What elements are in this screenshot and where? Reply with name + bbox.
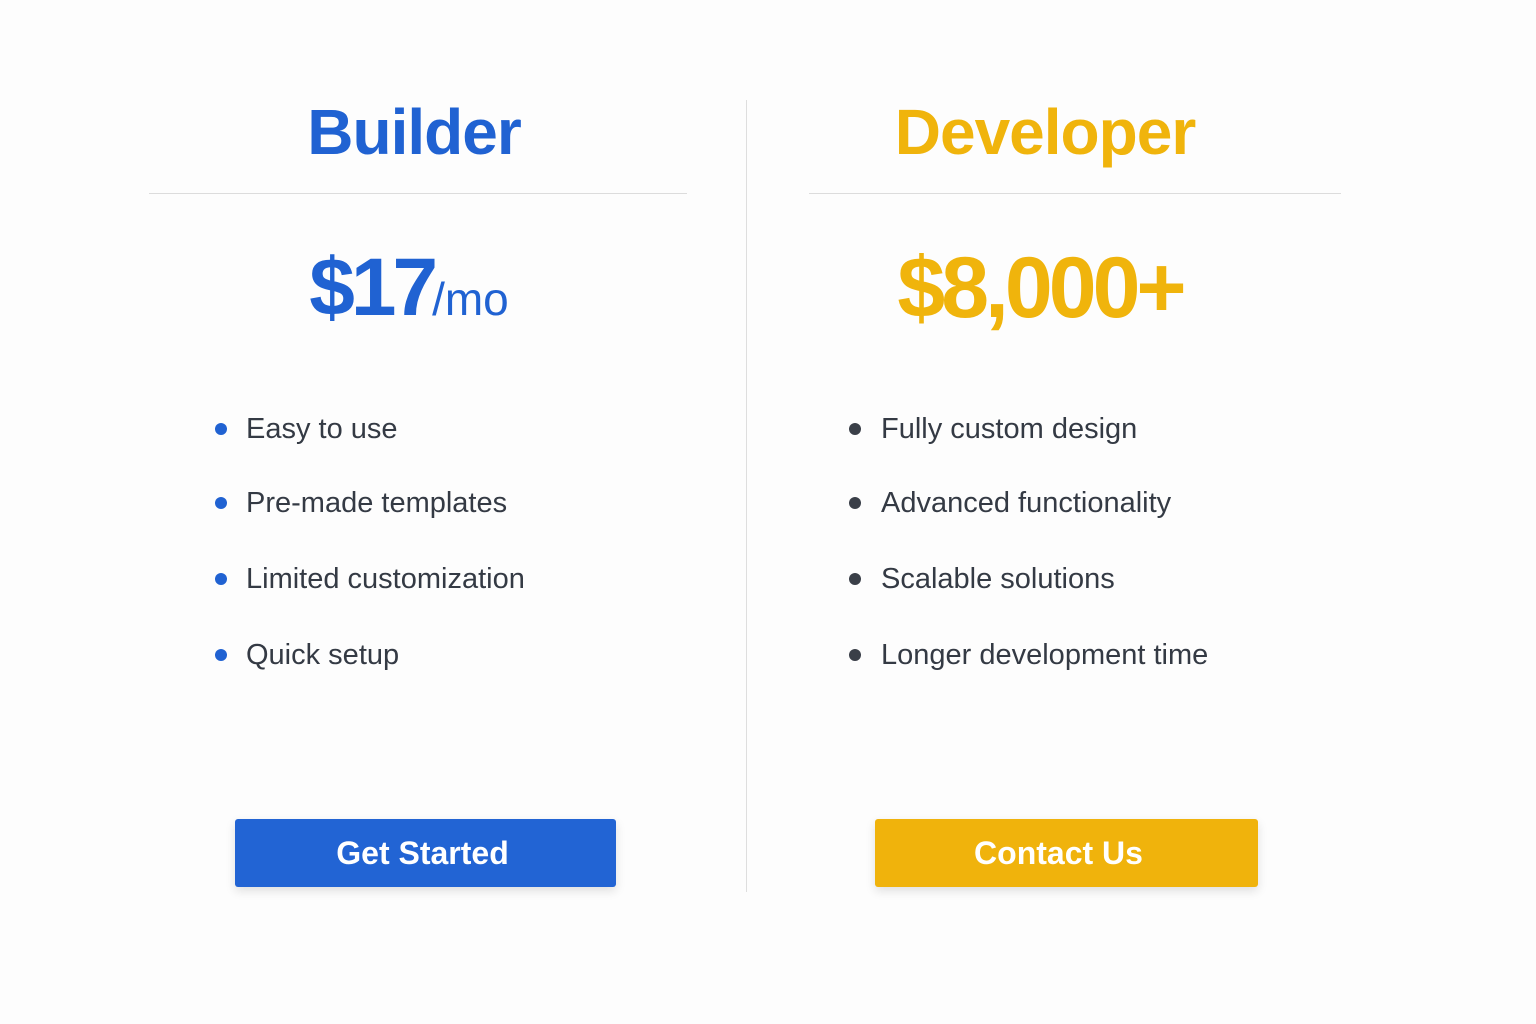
builder features list: Pre-made templates: [246, 487, 507, 519]
panel: builder: [149, 96, 687, 894]
button: contact us: [875, 819, 1258, 887]
panel: developer: [809, 96, 1341, 894]
builder features list: Limited customization: [246, 563, 525, 595]
developer features list: Fully custom design: [881, 413, 1137, 445]
developer features list: Advanced functionality: [881, 487, 1171, 519]
developer features list: [849, 413, 1208, 671]
developer price: $8,000+: [897, 240, 1183, 336]
developer features list: Longer development time: [881, 639, 1208, 671]
developer title: Developer: [895, 96, 1195, 168]
button: get started: Get Started: [336, 835, 509, 871]
builder features list: Quick setup: [246, 639, 399, 671]
builder features list: Easy to use: [246, 413, 398, 445]
vertical divider: [746, 100, 747, 892]
button: get started: [235, 819, 616, 887]
developer features list: Scalable solutions: [881, 563, 1115, 595]
button: contact us: Contact Us: [974, 835, 1143, 871]
builder features list: [215, 413, 525, 671]
builder price: $17/mo: [309, 242, 509, 333]
builder title: Builder: [307, 96, 521, 168]
